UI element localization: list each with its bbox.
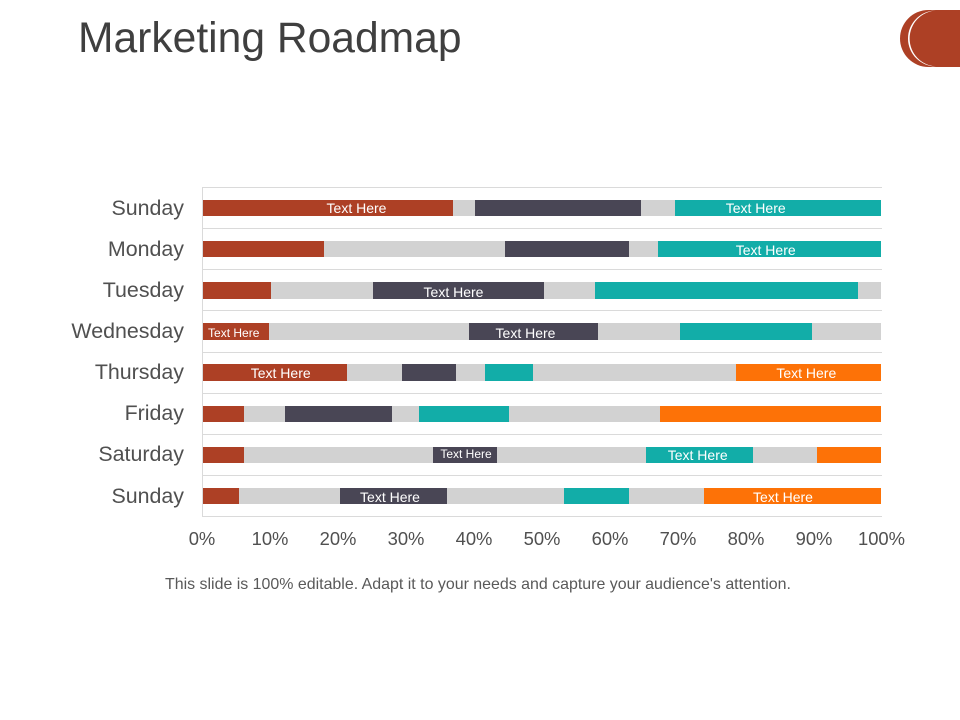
x axis labels: 50% (524, 528, 560, 549)
row: Wednesday: Text Here (208, 326, 260, 340)
row: Tuesday: Text Here (424, 284, 484, 300)
x axis labels: 20% (320, 528, 356, 549)
row: Saturday: Text Here (668, 447, 728, 463)
row: Sunday (second): Sunday (111, 484, 184, 508)
row: Saturday (98, 442, 881, 466)
x axis labels: 100% (858, 528, 905, 549)
row: Sunday (second): Text Here (753, 489, 813, 505)
row: Thursday (95, 360, 881, 384)
row: Sunday (second) (111, 484, 881, 508)
row: Friday: Friday (125, 401, 184, 425)
row: Sunday: Sunday (111, 196, 184, 220)
row: Sunday: Text Here (726, 200, 786, 216)
row: Monday: Text Here (736, 242, 796, 258)
row: Wednesday: Text Here (496, 325, 556, 341)
row: Wednesday: Wednesday (71, 319, 184, 343)
x axis labels: 90% (796, 528, 832, 549)
title: Marketing Roadmap (78, 14, 462, 62)
x axis labels: 10% (252, 528, 288, 549)
row: Tuesday (103, 278, 881, 302)
x axis labels: 80% (728, 528, 764, 549)
x axis labels: 30% (388, 528, 424, 549)
row: Saturday: Text Here (440, 447, 492, 461)
stacked bar chart (71, 187, 905, 549)
row: Wednesday (71, 319, 881, 343)
row: Thursday: Thursday (95, 360, 184, 384)
row: Monday (108, 237, 881, 261)
row: Monday: Monday (108, 237, 184, 261)
x axis labels: 70% (660, 528, 696, 549)
x axis labels (189, 528, 905, 549)
row: Thursday: Text Here (776, 365, 836, 381)
row: Sunday (second): Text Here (360, 489, 420, 505)
row: Sunday: Text Here (327, 200, 387, 216)
row: Friday (125, 401, 881, 425)
row: Thursday: Text Here (251, 365, 311, 381)
row: Tuesday: Tuesday (103, 278, 184, 302)
icon: rounded corner badge (900, 10, 960, 67)
row: Sunday (111, 196, 881, 220)
x axis labels: 40% (456, 528, 492, 549)
row: Saturday: Saturday (98, 442, 184, 466)
footer note: This slide is 100% editable. Adapt it to your needs and capture your audience's attention. (165, 576, 791, 593)
x axis labels: 0% (189, 528, 215, 549)
x axis labels: 60% (592, 528, 628, 549)
